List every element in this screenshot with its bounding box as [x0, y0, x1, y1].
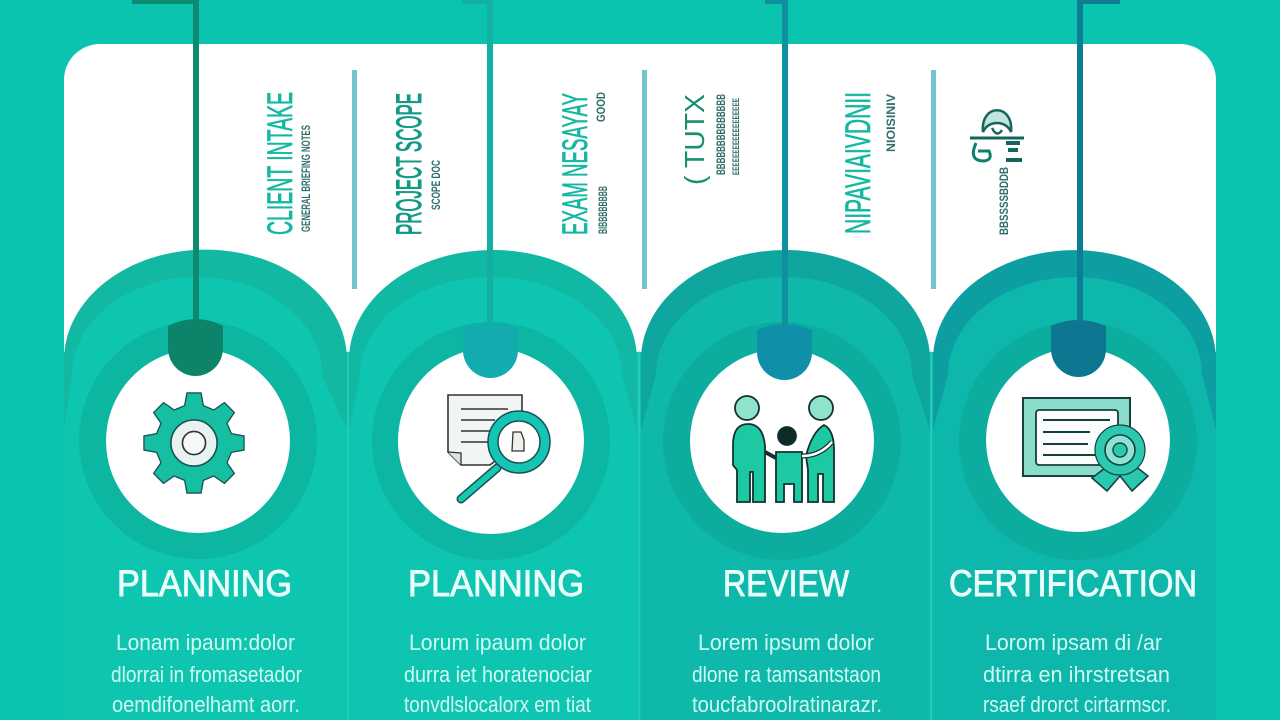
arch 2 [349, 250, 637, 720]
white disc 2 [398, 348, 584, 534]
body 2: Lorum ipaum dolor [409, 630, 586, 655]
body 1: Lonam ipaum:dolor [116, 630, 295, 655]
caption 4 heading: ( TUTX [679, 94, 710, 185]
caption 3 detail bottom: BIBBBBBBBB [596, 186, 610, 234]
ring 4 [959, 322, 1197, 560]
inner arch 2 [349, 277, 637, 720]
inner arch 3 [641, 277, 930, 720]
tab 3 [757, 324, 812, 380]
connector line 1 [132, 1, 196, 320]
ring 1 [79, 321, 317, 559]
caption 4 detail one: BBBBBBBBBBBBBB [714, 94, 728, 175]
icon: people [733, 396, 834, 502]
white disc 1 [106, 349, 290, 533]
caption 2 detail: SCOPE DOC [429, 160, 443, 210]
icon: gear [144, 393, 244, 493]
body 4: dtirra en ihrstretsan [983, 662, 1170, 687]
body 3: toucfabroolratinarazr. [692, 692, 882, 717]
connector line 3 [765, 1, 785, 324]
body 2: tonvdlslocalorx em tiat [404, 692, 591, 717]
ring 3 [663, 322, 901, 560]
body 1 [111, 630, 302, 717]
caption 1 detail: GENERAL BRIEFING NOTES [299, 125, 313, 232]
ring 2 [372, 322, 610, 560]
white disc 4 [986, 348, 1170, 532]
caption 5 detail: NIOISINIV [884, 94, 898, 152]
divider 3 [931, 70, 936, 289]
heading 2: PLANNING [408, 563, 584, 604]
panel: vertical captions [261, 70, 1024, 289]
heading 4: CERTIFICATION [949, 563, 1197, 604]
panel: column 1 planning [64, 1, 347, 720]
body 1: oemdifonelhamt aorr. [112, 692, 300, 717]
panel: column 2 planning [349, 1, 637, 720]
tab 2 [463, 322, 518, 378]
body 3: Lorem ipsum dolor [698, 630, 874, 655]
divider 1 [352, 70, 357, 289]
panel: column 3 review [641, 1, 930, 720]
arch 4 [933, 250, 1216, 720]
icon: caption 6 emblem [970, 110, 1024, 161]
panel: column 4 certification [933, 1, 1216, 720]
white disc 3 [690, 349, 874, 533]
heading 3: REVIEW [723, 563, 849, 604]
body 2: durra iet horatenociar [404, 662, 592, 687]
body 4: rsaef drorct cirtarmscr. [983, 692, 1171, 717]
body 4 [983, 630, 1171, 717]
body 2 [404, 630, 592, 717]
caption 6 detail: BBSSSSBDDB [997, 167, 1011, 235]
caption 4 detail two: EEEEEEEEEEEEEEEEEE [731, 98, 741, 175]
body 3 [692, 630, 882, 717]
divider 2 [642, 70, 647, 289]
panel: white card [64, 44, 1216, 352]
arch 3 [641, 250, 930, 720]
inner arch 1 [64, 277, 347, 720]
body 3: dlone ra tamsantstaon [692, 662, 881, 687]
arch 1 [64, 250, 347, 720]
body 4: Lorom ipsam di /ar [985, 630, 1162, 655]
tab 1 [168, 319, 223, 376]
heading 1: PLANNING [117, 563, 292, 604]
body 1: dlorrai in fromasetador [111, 662, 302, 687]
connector line 4 [1080, 1, 1120, 320]
caption 5 heading: NIPAVIAIVDNII [839, 92, 878, 234]
inner arch 4 [933, 277, 1216, 720]
caption 3 detail top: GOOD [594, 92, 608, 122]
icon: document and magnifier [448, 395, 550, 499]
tab 4 [1051, 320, 1106, 377]
icon: certificate [1023, 398, 1148, 491]
connector line 2 [462, 1, 490, 322]
